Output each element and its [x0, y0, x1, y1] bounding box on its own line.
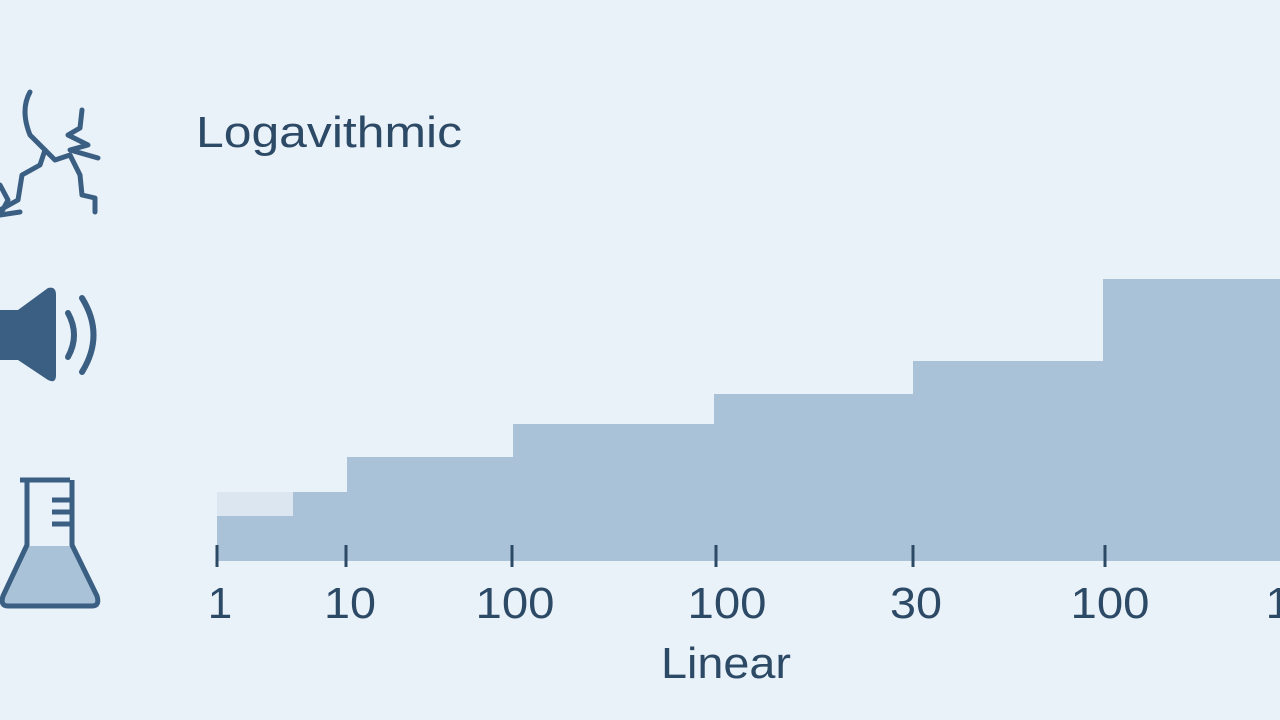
axis labels: 30	[890, 579, 942, 628]
axis labels: 100	[688, 579, 766, 628]
axis title: Linear: Linear	[661, 639, 791, 688]
icon: speaker	[0, 288, 94, 381]
icon: cracks	[0, 92, 98, 215]
axis labels: 10	[324, 579, 376, 628]
axis labels: 100	[476, 579, 554, 628]
axis labels: 1	[208, 579, 232, 628]
step chart	[217, 279, 1280, 567]
icon: flask	[2, 480, 98, 606]
axis labels: 100	[1070, 579, 1150, 628]
title: Logarithmic: Logavithmic	[196, 108, 462, 157]
axis labels	[208, 579, 1280, 628]
